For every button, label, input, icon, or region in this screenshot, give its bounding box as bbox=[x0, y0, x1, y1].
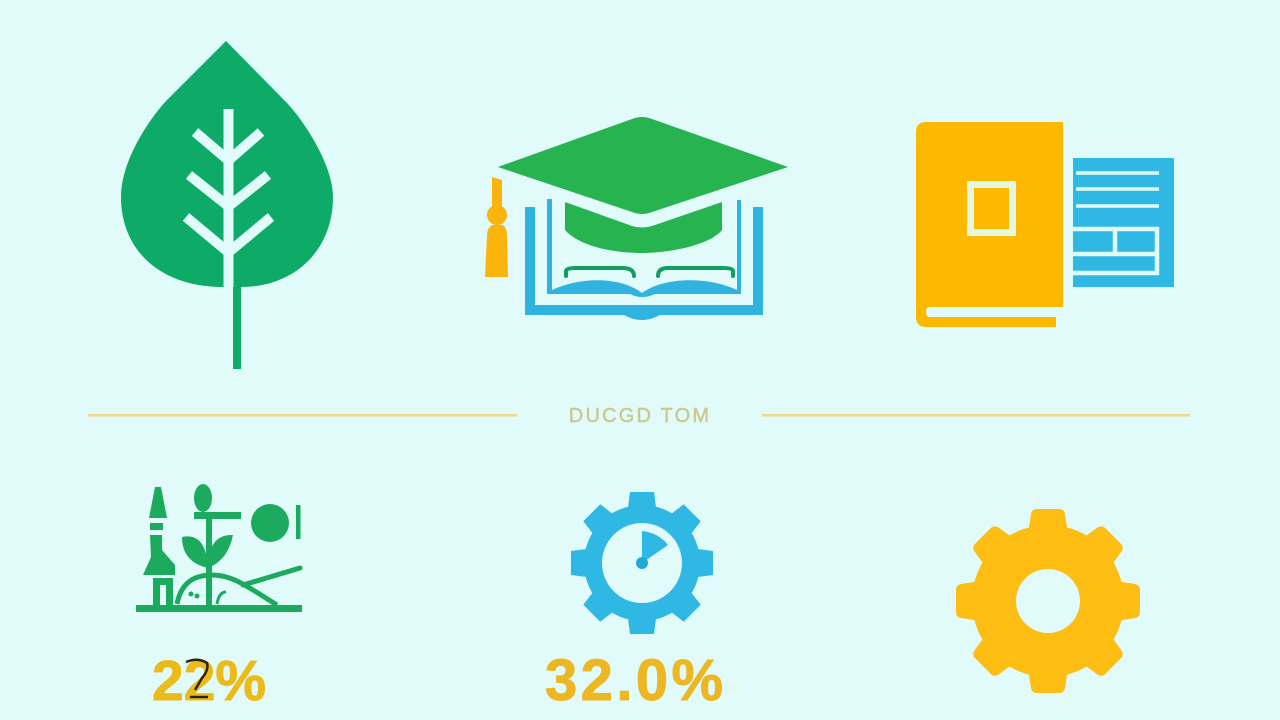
divider line left bbox=[88, 414, 517, 416]
icon: leaf tree bbox=[121, 41, 333, 369]
icon: yellow book with document bbox=[916, 122, 1174, 327]
graduation cap top bbox=[498, 117, 788, 214]
blue document bbox=[1073, 158, 1174, 287]
icon: blue gear with clock bbox=[571, 492, 713, 634]
graduation cap band bbox=[565, 202, 722, 253]
divider label: DUCGD TOM bbox=[569, 405, 711, 427]
tassel bbox=[485, 177, 508, 277]
stat: 32.0%: 32.0% bbox=[545, 648, 726, 713]
icon: plants and field bbox=[136, 484, 302, 612]
icon: graduation cap on open book bbox=[485, 117, 788, 320]
stat: 22%: 22% bbox=[152, 649, 266, 713]
open book bbox=[525, 199, 763, 320]
yellow book bbox=[916, 122, 1063, 327]
icon: yellow gear bbox=[956, 509, 1140, 693]
divider line right bbox=[762, 414, 1190, 416]
